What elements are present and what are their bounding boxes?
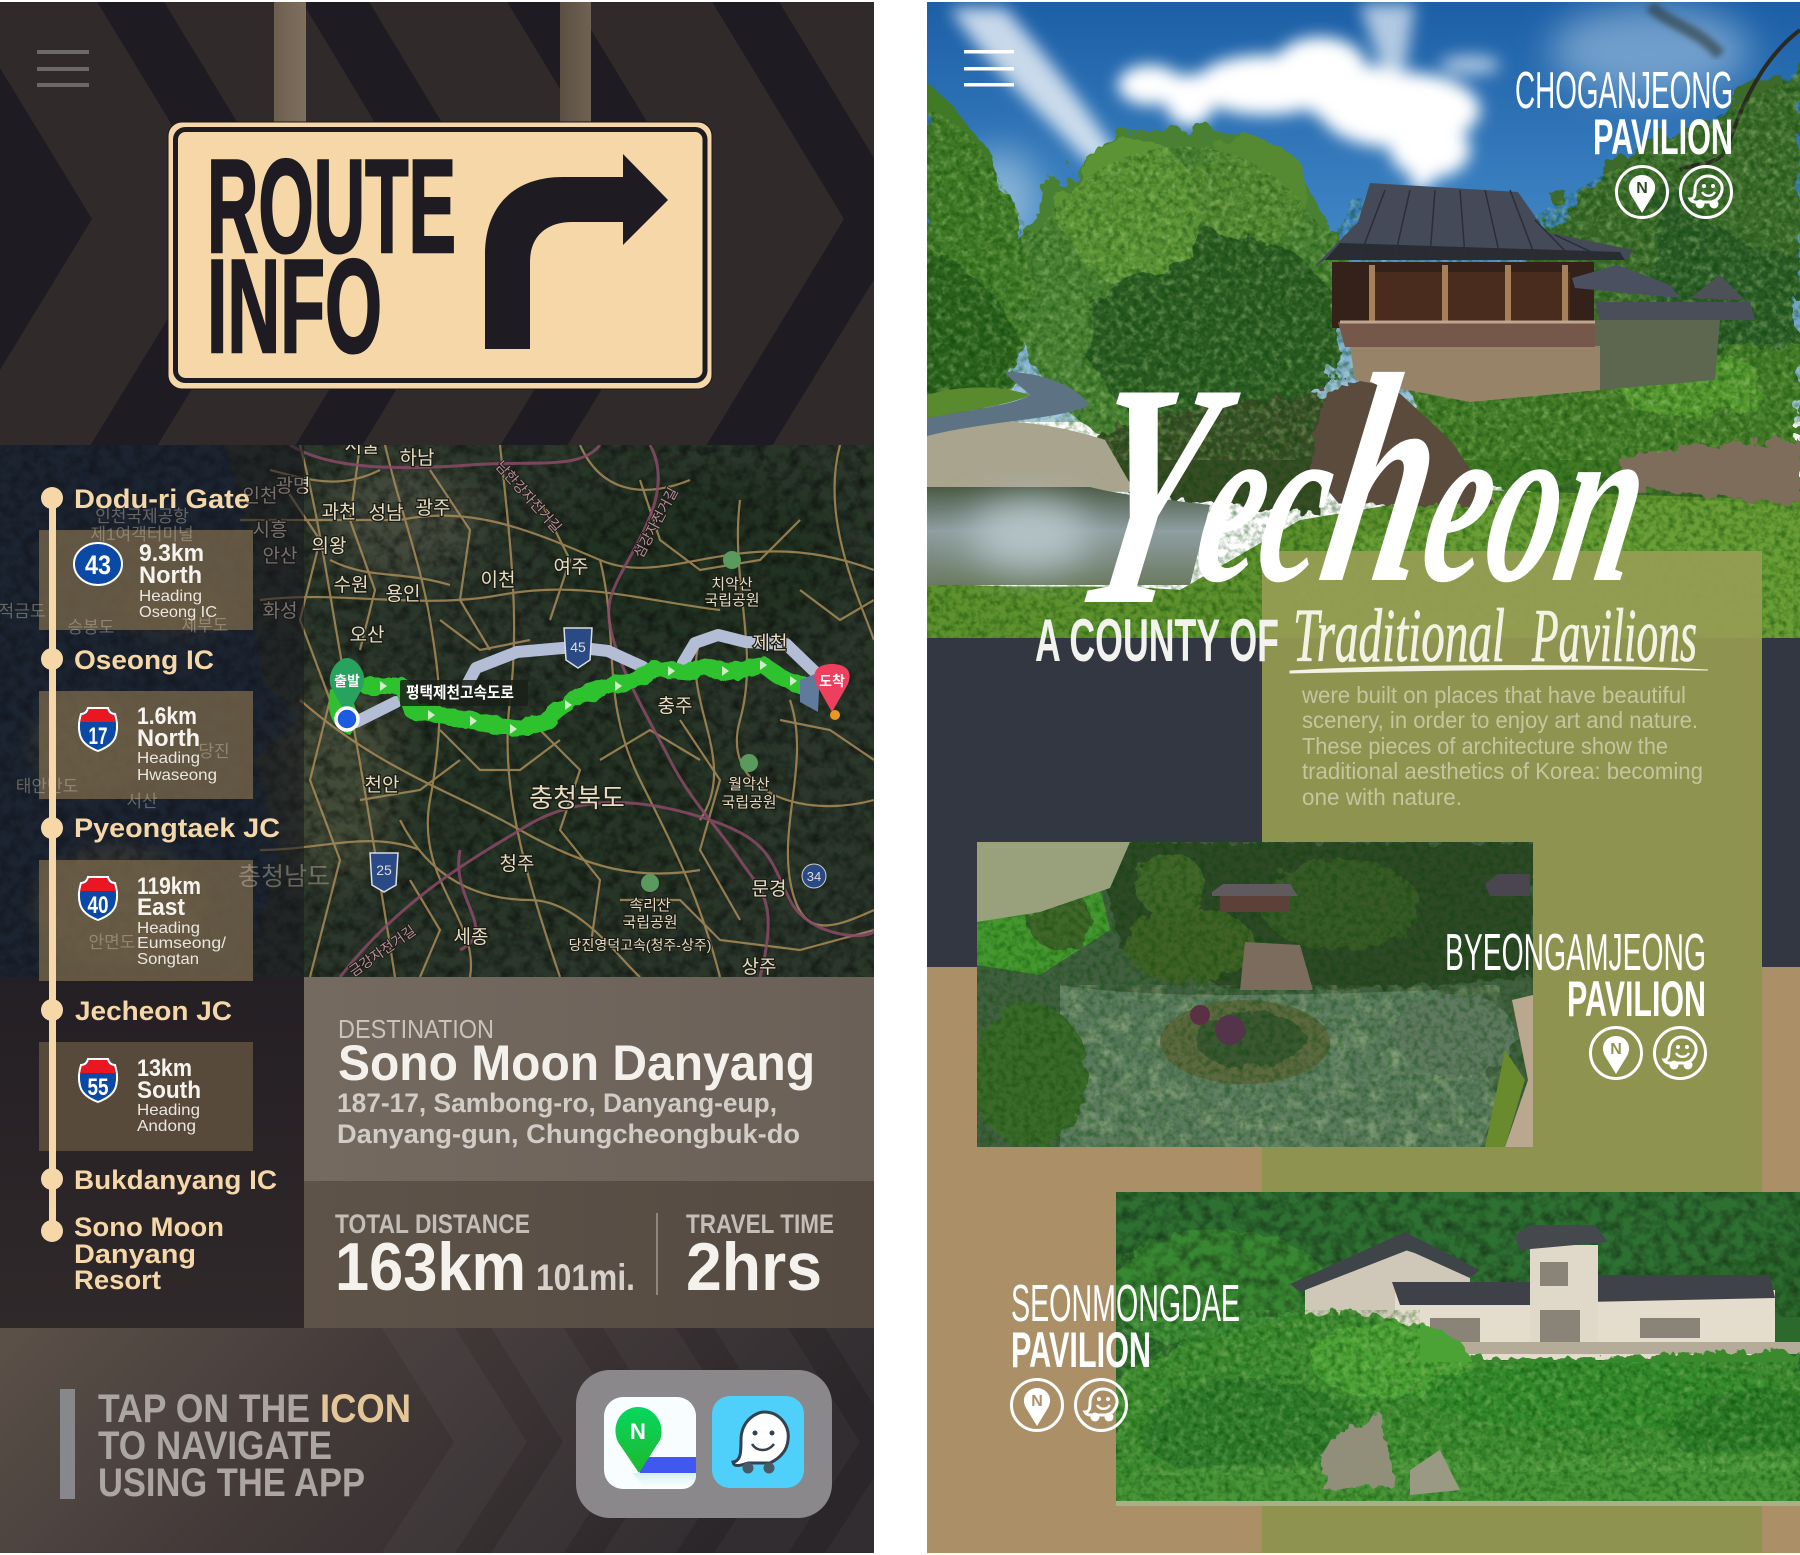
left sidebar background: 승봉도 bbox=[68, 618, 114, 637]
left sidebar background: 제1여객터미널 bbox=[90, 525, 194, 544]
map place labels: 화성 bbox=[263, 600, 297, 622]
sign title bbox=[207, 133, 456, 381]
marker: start bbox=[330, 658, 364, 730]
step 1: route 43: North bbox=[139, 562, 202, 589]
icon: waze bbox=[1654, 1028, 1706, 1078]
path and hedge bbox=[1485, 995, 1533, 1147]
foliage texture bbox=[927, 60, 1800, 640]
marker: destination bbox=[814, 664, 850, 720]
stop names: Sono Moon bbox=[74, 1212, 224, 1242]
app tray bbox=[576, 1370, 832, 1518]
map bbox=[0, 435, 874, 980]
step 3: route 40: East bbox=[137, 894, 185, 921]
map place labels: 여주 bbox=[554, 556, 588, 578]
step 1: route 43: Oseong IC bbox=[139, 604, 217, 621]
ground bbox=[927, 490, 1800, 640]
highway markers bbox=[370, 628, 826, 892]
rocks bbox=[1322, 1412, 1460, 1495]
subtitle: Traditional bbox=[1293, 594, 1505, 678]
step 3: route 40 bbox=[79, 873, 227, 968]
total distance: 163km bbox=[335, 1229, 526, 1305]
travel time: TRAVEL TIME bbox=[686, 1209, 834, 1239]
map place labels: 남한강자전거길 bbox=[493, 458, 565, 536]
step 1: route 43: 9.3km bbox=[139, 540, 204, 567]
icon: naver pin: N bbox=[1610, 1041, 1622, 1058]
panel: distance and time bbox=[304, 1181, 874, 1329]
map place labels: 속리산 bbox=[629, 897, 671, 914]
sign title: ROUTE bbox=[207, 133, 456, 281]
rocks bbox=[1310, 375, 1800, 505]
map place labels: 과천 bbox=[322, 501, 356, 523]
step 1: route 43: Heading bbox=[139, 588, 202, 605]
panel: destination bbox=[304, 977, 874, 1181]
step 4: route 55: South bbox=[137, 1077, 201, 1104]
map place labels: 광주 bbox=[416, 497, 450, 519]
body text: These pieces of architecture show the bbox=[1302, 733, 1668, 759]
sign title: INFO bbox=[207, 233, 382, 381]
instruction text: TAP ON THE bbox=[98, 1387, 310, 1431]
map place labels: 문경 bbox=[752, 878, 786, 900]
step 3: route 40: 40 bbox=[88, 892, 108, 919]
map place labels: 충청북도 bbox=[529, 783, 625, 813]
arrow: turn right bbox=[485, 154, 668, 349]
map place labels: 하남 bbox=[400, 447, 434, 469]
instruction text bbox=[98, 1387, 411, 1505]
icon: waze bbox=[1680, 166, 1732, 218]
photo: Choganjeong pavilion bbox=[920, 2, 1800, 640]
step 3: route 40: 119km bbox=[137, 873, 201, 900]
icon: naver pin bbox=[1616, 166, 1668, 218]
step 4: route 55: 55 bbox=[88, 1074, 108, 1101]
map place labels: 이천 bbox=[481, 569, 515, 591]
shrubs and rocks bbox=[1090, 395, 1330, 515]
small pavilion roofs bbox=[1212, 874, 1530, 912]
subtitle: A COUNTY OF bbox=[1035, 607, 1279, 674]
sign posts bbox=[274, 2, 591, 123]
icon: menu bbox=[37, 50, 89, 87]
panel: tap on the icon footer bbox=[0, 1328, 970, 1553]
map place labels: 서울 bbox=[345, 435, 379, 457]
map place labels: 인천 bbox=[243, 485, 277, 507]
main route green bbox=[367, 665, 804, 729]
highway markers: 25 bbox=[376, 862, 392, 878]
map place labels: 광명 bbox=[276, 475, 310, 497]
stone base bbox=[1350, 346, 1600, 402]
background: tan band bbox=[927, 967, 1800, 1553]
step 3: route 40: Songtan bbox=[137, 951, 199, 968]
map place labels: 금강자전거길 bbox=[346, 922, 418, 980]
hillside greenery bbox=[1116, 1312, 1800, 1506]
stop names: Bukdanyang IC bbox=[74, 1165, 277, 1195]
road sign: route info bbox=[168, 122, 712, 389]
body text: scenery, in order to enjoy art and nature. bbox=[1302, 707, 1698, 733]
map place labels: 국립공원 bbox=[704, 592, 760, 609]
bank and river bbox=[927, 372, 1210, 585]
map place labels: 당진영덕고속(청주-상주) bbox=[569, 937, 711, 953]
map place labels: 청주 bbox=[500, 853, 534, 875]
map place labels: 성남 bbox=[369, 502, 403, 524]
destination name: Sono Moon Danyang bbox=[338, 1035, 815, 1091]
stop names: Jecheon JC bbox=[75, 996, 232, 1026]
total distance: 101mi. bbox=[536, 1257, 635, 1298]
step 2: route 17: Hwaseong bbox=[137, 767, 217, 784]
instruction text: USING THE APP bbox=[98, 1461, 365, 1505]
map place labels: 천안 bbox=[365, 774, 399, 796]
pavilion bbox=[1313, 183, 1755, 347]
building bbox=[1290, 1225, 1800, 1360]
rear wall bbox=[1590, 320, 1720, 390]
map place labels: 섬강자전거길 bbox=[630, 485, 681, 561]
marker: destination: 도착 bbox=[819, 673, 845, 689]
marker: start: 출발 bbox=[334, 673, 360, 689]
label: Choganjeong pavilion bbox=[1515, 62, 1733, 218]
title: Yecheon: heon bbox=[1303, 313, 1800, 645]
left sidebar background: 서산 bbox=[126, 792, 158, 811]
panel: route info bbox=[0, 2, 874, 1553]
map place labels: 치악산 bbox=[711, 576, 753, 593]
icon: naver pin: N bbox=[1031, 1393, 1043, 1410]
subtitle bbox=[1035, 594, 1708, 678]
stop names bbox=[74, 484, 280, 1295]
body text: were built on places that have beautiful bbox=[1301, 682, 1686, 708]
step 4: route 55: Andong bbox=[137, 1118, 196, 1135]
map place labels: 국립공원 bbox=[721, 794, 777, 811]
instruction text: ICON bbox=[320, 1387, 411, 1431]
map place labels: 오산 bbox=[350, 624, 384, 646]
title: Yecheon: Y bbox=[1054, 317, 1256, 671]
sea bbox=[0, 445, 300, 977]
title: Yecheon: ec bbox=[1180, 372, 1356, 632]
icon: menu bbox=[964, 50, 1014, 86]
photo: Byeongamjeong pavilion bbox=[972, 842, 1533, 1147]
photo: Seonmongdae pavilion bbox=[1100, 1165, 1800, 1506]
total distance bbox=[335, 1209, 635, 1305]
stop names: Danyang bbox=[74, 1239, 196, 1269]
left sidebar background: 당진 bbox=[198, 742, 230, 761]
stop names: Pyeongtaek JC bbox=[74, 813, 280, 843]
header background with chevrons bbox=[0, 0, 911, 446]
step 4: route 55 bbox=[79, 1055, 201, 1135]
icon: waze bbox=[1076, 1380, 1126, 1430]
panel: Yecheon pavilions bbox=[920, 2, 1800, 1553]
left sidebar background: 태안반도 bbox=[16, 777, 78, 796]
label: Byeongamjeong pavilion: PAVILION bbox=[1567, 971, 1706, 1027]
label: Seonmongdae pavilion: PAVILION bbox=[1011, 1322, 1151, 1378]
destination label: DESTINATION bbox=[338, 1014, 494, 1044]
route direction arrows bbox=[380, 660, 797, 734]
map place labels: 제천 bbox=[753, 632, 787, 654]
destination address: Danyang-gun, Chungcheongbuk-do bbox=[337, 1119, 800, 1149]
branches bbox=[1680, 30, 1800, 170]
step 1: route 43 bbox=[74, 540, 217, 621]
destination address bbox=[337, 1088, 800, 1149]
roads bbox=[240, 445, 874, 977]
icon: naver map: N bbox=[630, 1419, 646, 1444]
stop names: Dodu-ri Gate bbox=[74, 484, 250, 514]
left sidebar background: 제부도 bbox=[182, 616, 228, 635]
body text bbox=[1301, 682, 1703, 810]
map place labels bbox=[243, 435, 787, 980]
step 2: route 17: 17 bbox=[88, 723, 108, 750]
step 2: route 17: North bbox=[137, 725, 200, 752]
left sidebar background: 충청남도 bbox=[238, 863, 330, 891]
background: olive panel bbox=[1262, 551, 1762, 1553]
step 4: route 55: 13km bbox=[137, 1055, 192, 1082]
map place labels: 안산 bbox=[263, 545, 297, 567]
highway markers: 45 bbox=[570, 639, 586, 655]
label: Seonmongdae pavilion: SEONMONGDAE bbox=[1011, 1275, 1240, 1333]
map place labels: 상주 bbox=[742, 956, 776, 978]
island shrubs bbox=[1190, 1005, 1245, 1045]
highway markers: 34 bbox=[807, 869, 821, 884]
park markers bbox=[641, 551, 758, 892]
route alternative gray bbox=[356, 635, 815, 722]
label: Seonmongdae pavilion bbox=[1011, 1275, 1240, 1430]
travel time: 2hrs bbox=[686, 1229, 822, 1305]
total distance: TOTAL DISTANCE bbox=[335, 1209, 530, 1239]
trees bbox=[1015, 125, 1345, 455]
step 3: route 40: Heading bbox=[137, 920, 200, 937]
farmland bbox=[977, 842, 1130, 922]
map place labels: 의왕 bbox=[312, 535, 346, 557]
left sidebar background bbox=[0, 445, 330, 1329]
map place labels: 월악산 bbox=[728, 776, 770, 793]
map place labels: 충주 bbox=[658, 695, 692, 717]
label: Byeongamjeong pavilion bbox=[1445, 924, 1706, 1078]
stop names: Resort bbox=[74, 1265, 161, 1295]
map place labels: 용인 bbox=[386, 583, 420, 605]
map place labels: 국립공원 bbox=[622, 914, 678, 931]
step 1: route 43: 43 bbox=[85, 550, 111, 580]
step 4: route 55: Heading bbox=[137, 1102, 200, 1119]
timeline bbox=[41, 487, 63, 1242]
icon: naver pin: N bbox=[1636, 180, 1648, 197]
icon: naver map bbox=[604, 1397, 696, 1489]
step 2: route 17 bbox=[79, 703, 217, 784]
left sidebar background: 인천국제공항 bbox=[95, 507, 189, 526]
hillside bbox=[1530, 60, 1800, 520]
left sidebar background: 안면도 bbox=[89, 933, 135, 952]
step 2: route 17: Heading bbox=[137, 750, 200, 767]
map place labels: 세종 bbox=[454, 926, 488, 948]
body text: one with nature. bbox=[1302, 784, 1462, 810]
step 2: route 17: 1.6km bbox=[137, 703, 197, 730]
background: charcoal band bbox=[927, 638, 1800, 967]
highways bbox=[290, 445, 874, 977]
body text: traditional aesthetics of Korea: becoming bbox=[1302, 758, 1703, 784]
step 3: route 40: Eumseong/ bbox=[137, 935, 227, 952]
icon: naver pin bbox=[1590, 1028, 1642, 1078]
icon: naver pin bbox=[1012, 1380, 1062, 1430]
route label bbox=[400, 680, 528, 706]
stop names: Oseong IC bbox=[74, 645, 214, 675]
route label: 평택제천고속도로 bbox=[406, 684, 514, 702]
rock face bbox=[1240, 942, 1313, 990]
icon: waze bbox=[712, 1396, 804, 1488]
map place labels: 수원 bbox=[334, 574, 368, 596]
instruction text: TO NAVIGATE bbox=[98, 1424, 332, 1468]
map place labels: 시흥 bbox=[253, 519, 287, 541]
destination address: 187-17, Sambong-ro, Danyang-eup, bbox=[337, 1088, 777, 1118]
accent bar bbox=[60, 1389, 75, 1499]
